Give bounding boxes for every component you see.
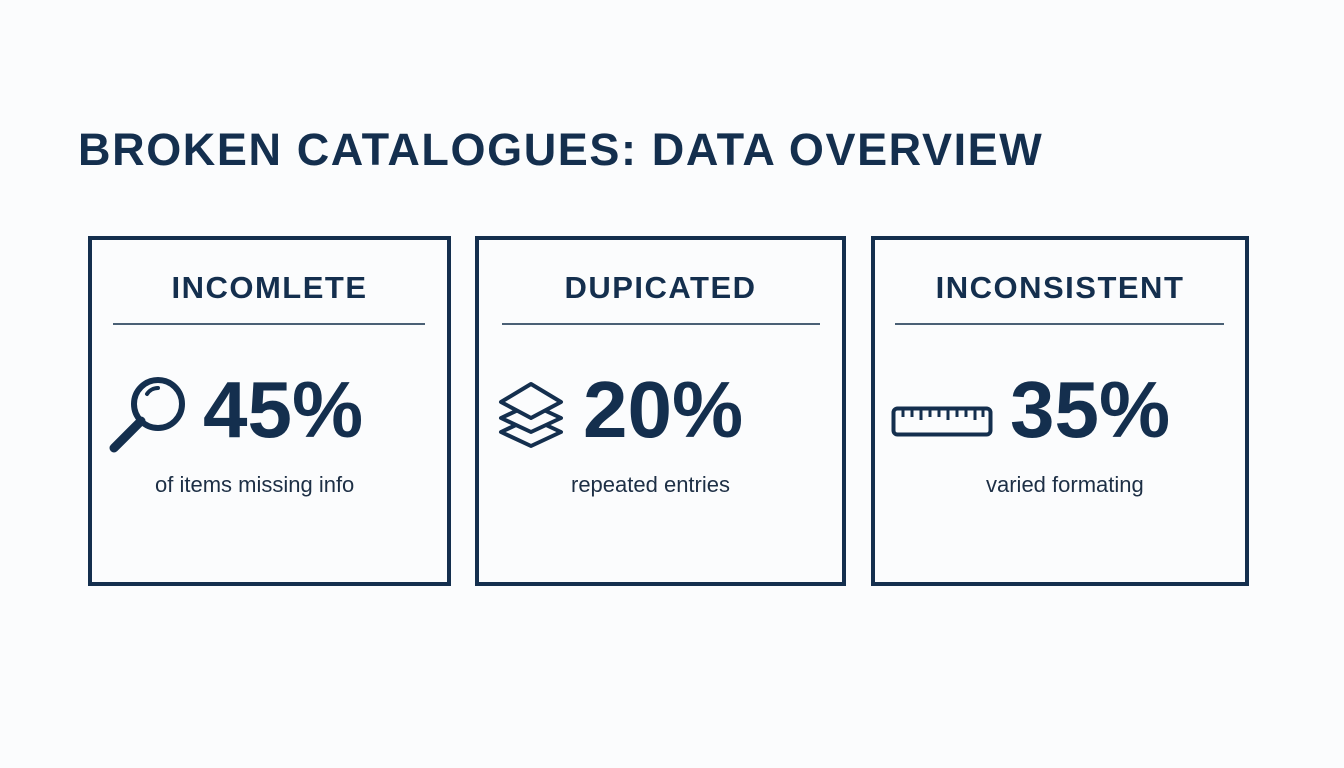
heading: duplicated: DUPICATED — [564, 270, 757, 305]
title: BROKEN CATALOGUES: DATA OVERVIEW — [78, 124, 1043, 175]
stat: 20%: 20% — [583, 365, 743, 454]
heading: incomplete: INCOMLETE — [171, 270, 368, 305]
stat: 35%: 35% — [1010, 365, 1170, 454]
icon: ruler — [892, 406, 992, 436]
icon: magnifier — [110, 377, 185, 452]
panel: incomplete — [88, 236, 451, 586]
stat: 45%: 45% — [203, 365, 363, 454]
icon: layers — [498, 382, 564, 448]
heading: inconsistent: INCONSISTENT — [936, 270, 1184, 305]
panel: duplicated — [475, 236, 846, 586]
caption: repeated entries — [571, 472, 730, 497]
caption: varied formating — [986, 472, 1144, 497]
caption: of items missing info — [155, 472, 354, 497]
panel: inconsistent — [871, 236, 1249, 586]
